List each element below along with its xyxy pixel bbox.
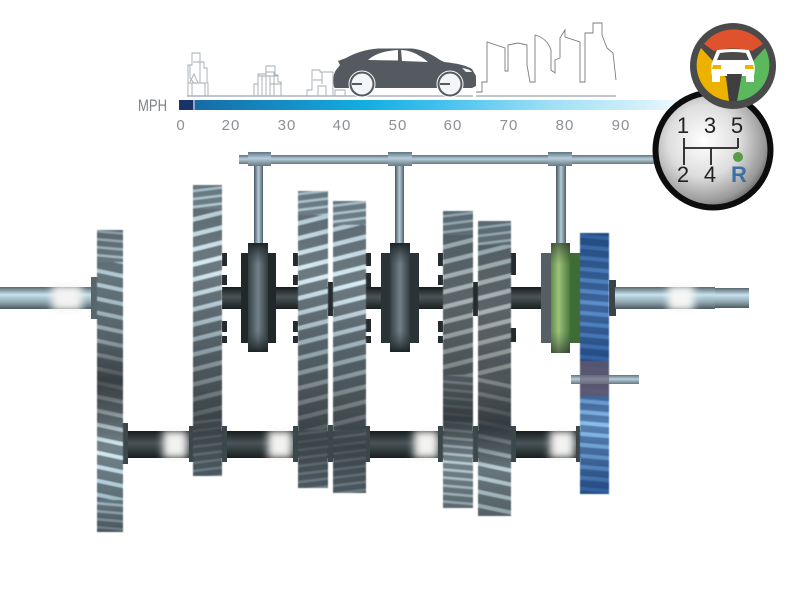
synchro sleeve 3: engaged green bbox=[541, 243, 581, 353]
skyline: second cluster bbox=[254, 66, 282, 96]
rail collars bbox=[248, 152, 572, 166]
car body bbox=[333, 48, 476, 88]
red segment bbox=[704, 29, 763, 51]
gear numbers: 2 bbox=[677, 162, 689, 187]
synchro hub small teeth bbox=[222, 253, 516, 343]
green sleeve bbox=[551, 243, 570, 353]
output collar bbox=[609, 280, 616, 316]
city skyline behind car bbox=[188, 23, 616, 96]
car front bbox=[711, 49, 755, 82]
gear 2 bbox=[193, 185, 222, 476]
shift rods bbox=[239, 152, 664, 244]
gear 7: blue reverse gear bbox=[580, 233, 609, 494]
car headlight bbox=[462, 68, 472, 72]
MPH label: MPH bbox=[138, 96, 167, 115]
speed scale numbers: 60 bbox=[444, 117, 462, 134]
gear 6 bbox=[478, 221, 511, 516]
icon: car dashboard badge bbox=[690, 23, 776, 109]
car headlights bbox=[712, 65, 754, 69]
gear numbers: 3 bbox=[704, 113, 716, 138]
MPH speed bar bbox=[179, 100, 694, 110]
input and upper main shaft bbox=[0, 277, 749, 319]
speed scale numbers bbox=[176, 117, 630, 134]
badge ring bbox=[690, 23, 776, 109]
gear 4 bbox=[333, 201, 366, 493]
gear numbers bbox=[677, 113, 743, 187]
current speed marker bbox=[179, 100, 193, 110]
icon: car bbox=[333, 48, 476, 97]
gear 3 bbox=[298, 191, 328, 488]
speed scale numbers: 30 bbox=[278, 117, 296, 134]
gear 5 bbox=[443, 211, 473, 508]
rear wheel bbox=[349, 71, 375, 97]
knob disc bbox=[656, 92, 770, 208]
synchro sleeve 1 bbox=[241, 243, 276, 352]
green segment bbox=[737, 48, 769, 101]
speed scale numbers: 0 bbox=[176, 117, 186, 134]
yellow segment bbox=[697, 48, 729, 101]
front wheel bbox=[437, 71, 463, 97]
car windshield bbox=[717, 52, 749, 60]
collars bbox=[122, 423, 580, 464]
current gear indicator bbox=[733, 152, 743, 162]
sleeve hub bbox=[541, 253, 581, 343]
reverse idler shaft bbox=[571, 375, 639, 384]
upper main shaft bbox=[222, 287, 592, 309]
speed scale numbers: 40 bbox=[333, 117, 351, 134]
skyline: right towers bbox=[476, 23, 616, 92]
speed scale numbers: 90 bbox=[612, 117, 630, 134]
synchro sleeve 2 bbox=[381, 243, 419, 352]
speed scale numbers: 50 bbox=[389, 117, 407, 134]
gear numbers: 4 bbox=[704, 162, 716, 187]
ground line bbox=[187, 95, 616, 97]
output shaft bbox=[615, 287, 715, 309]
input shaft bbox=[0, 287, 93, 309]
gear 1: input gear bbox=[97, 230, 123, 532]
gear shift knob bbox=[656, 92, 770, 208]
vertical fork rods bbox=[254, 166, 566, 244]
lower counter shaft bbox=[122, 423, 582, 464]
skyline: third cluster bbox=[307, 70, 345, 96]
gear numbers: 1 bbox=[677, 113, 689, 138]
input collar bbox=[91, 277, 98, 319]
car windows bbox=[368, 50, 428, 62]
steering column bbox=[727, 74, 742, 101]
speed scale numbers: 70 bbox=[500, 117, 518, 134]
speed scale numbers: 20 bbox=[222, 117, 240, 134]
reverse label: R bbox=[731, 162, 747, 187]
shift pattern lines bbox=[684, 138, 738, 165]
gear numbers: 5 bbox=[731, 113, 743, 138]
bar gradient bbox=[179, 100, 694, 110]
speed scale numbers: 80 bbox=[556, 117, 574, 134]
horizontal selector rail bbox=[239, 155, 664, 164]
skyline: left cluster bbox=[188, 53, 208, 96]
